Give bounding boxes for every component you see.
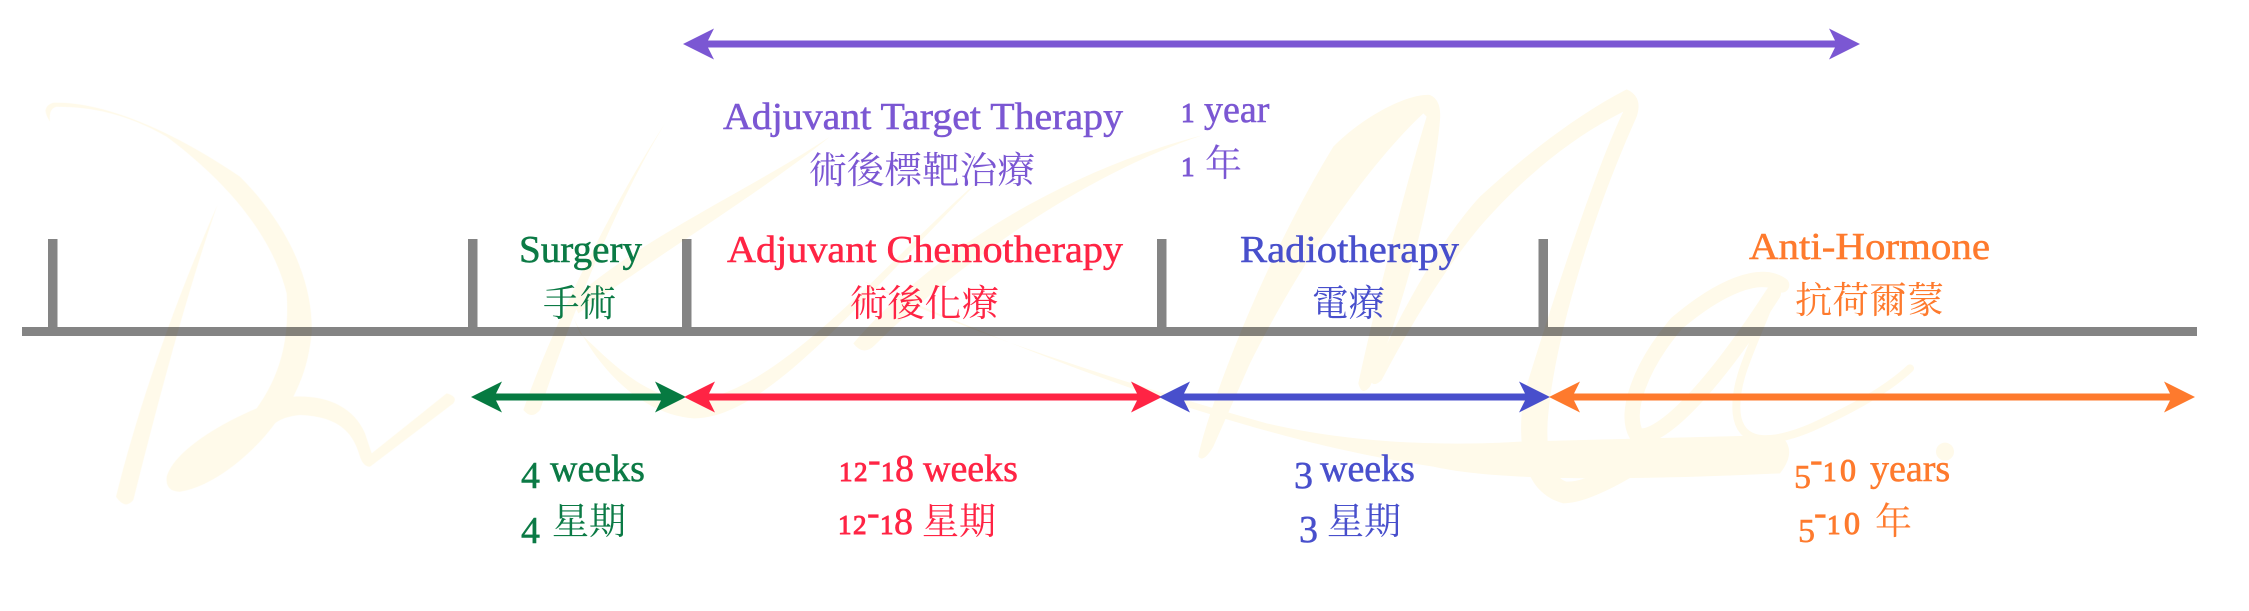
label: radiotherapy: 電療 — [1312, 283, 1385, 325]
duration: 1 year: 1 — [1181, 98, 1201, 128]
duration: 5-10 years: 0 — [1840, 452, 1864, 488]
arrow: anti-hormone span — [1549, 382, 2195, 412]
arrow: radiotherapy span — [1159, 382, 1550, 412]
label: surgery: Surgery — [519, 229, 642, 271]
duration: 5-10 years: 年 — [1875, 501, 1912, 543]
label: adjuvant chemotherapy: 術後化療 — [850, 283, 999, 325]
duration: 5-10 years: 5 — [1798, 513, 1815, 550]
label: anti-hormone: Anti-Hormone — [1749, 226, 1990, 268]
duration: 12-18 weeks: 2 — [853, 510, 866, 540]
label: surgery: 手術 — [543, 284, 616, 325]
duration: 4 weeks: 星期 — [552, 502, 626, 543]
arrow: chemotherapy span — [684, 382, 1162, 412]
duration: 12-18 weeks: - — [867, 492, 880, 534]
duration: 4 weeks: 4 — [521, 510, 550, 552]
duration: 1 year: 1 — [1181, 152, 1201, 182]
duration: 5-10 years: - — [1810, 439, 1823, 481]
duration: 4 weeks — [521, 448, 645, 552]
timeline axis with ticks — [22, 239, 2197, 336]
label: radiotherapy: Radiotherapy — [1240, 229, 1459, 271]
duration: 12-18 weeks: 8 — [895, 448, 924, 490]
label: adjuvant target therapy: 術後標靶治療 — [809, 150, 1035, 192]
duration: 1 year — [1181, 89, 1270, 185]
duration: 5-10 years: 0 — [1844, 505, 1868, 541]
duration: 12-18 weeks: weeks — [923, 448, 1018, 490]
duration: 4 weeks: weeks — [550, 448, 645, 490]
signature watermark — [46, 89, 1954, 504]
duration: 12-18 weeks: 1 — [881, 457, 894, 487]
duration: 3 weeks: 3 — [1299, 509, 1328, 551]
duration: 12-18 weeks: 8 — [894, 501, 922, 543]
duration: 12-18 weeks — [838, 439, 1018, 543]
duration: 5-10 years: 1 — [1827, 510, 1840, 540]
duration: 4 weeks: 4 — [521, 455, 550, 497]
duration: 5-10 years: - — [1814, 492, 1827, 534]
duration: 3 weeks — [1294, 448, 1415, 551]
label: adjuvant target therapy: Adjuvant Target Therapy — [723, 96, 1123, 138]
duration: 1 year: year — [1204, 89, 1270, 131]
arrow: adjuvant target therapy span — [683, 28, 1860, 60]
label: adjuvant chemotherapy: Adjuvant Chemotherapy — [727, 229, 1123, 271]
label: anti-hormone: 抗荷爾蒙 — [1795, 280, 1944, 322]
duration: 3 weeks: 星期 — [1327, 502, 1401, 543]
duration: 5-10 years: years — [1870, 448, 1950, 490]
duration: 12-18 weeks: 1 — [838, 510, 852, 540]
duration: 5-10 years: 5 — [1794, 459, 1811, 496]
label: anti-hormone — [1749, 226, 1990, 322]
label: surgery — [519, 229, 642, 325]
duration: 3 weeks: 3 — [1294, 455, 1322, 497]
duration: 3 weeks: weeks — [1320, 448, 1415, 490]
duration: 5-10 years: 1 — [1823, 457, 1836, 487]
duration: 12-18 weeks: 2 — [854, 457, 868, 487]
label: radiotherapy — [1240, 229, 1459, 325]
duration: 12-18 weeks: 1 — [880, 510, 894, 540]
duration: 1 year: 年 — [1205, 143, 1242, 185]
label: adjuvant chemotherapy — [727, 229, 1123, 325]
arrow: surgery span — [471, 382, 686, 412]
duration: 12-18 weeks: 星期 — [922, 502, 996, 543]
duration: 12-18 weeks: - — [868, 439, 881, 481]
label: adjuvant target therapy — [723, 96, 1123, 192]
duration: 5-10 years — [1794, 439, 1950, 550]
duration: 12-18 weeks: 1 — [839, 457, 852, 487]
